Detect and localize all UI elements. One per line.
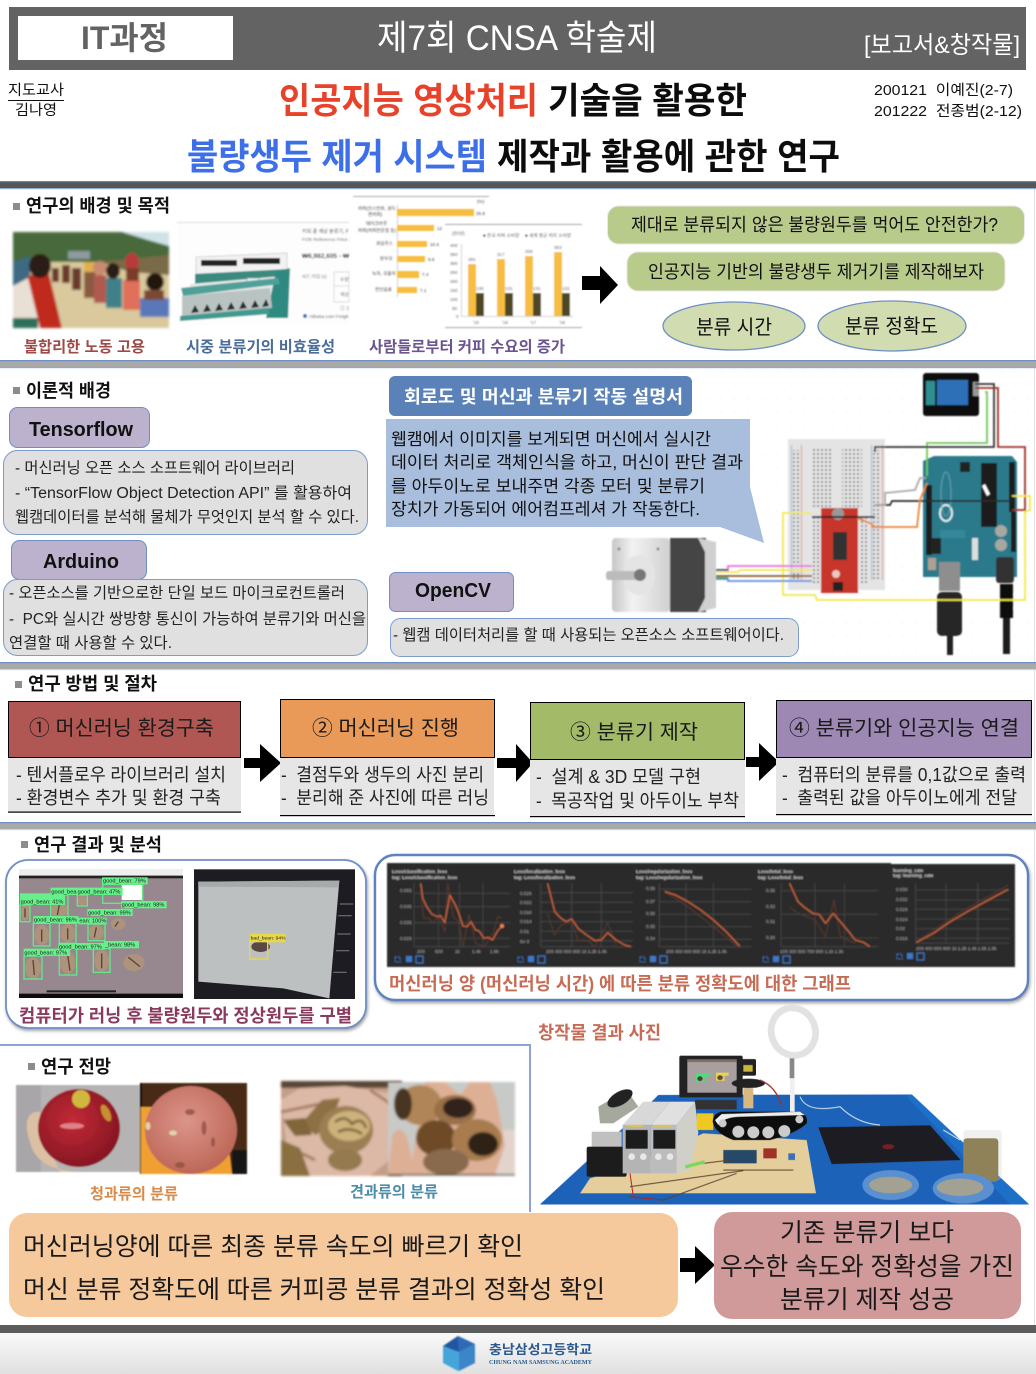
oval: accuracy [818, 301, 966, 351]
chart: coffee consumption columns: ■ 세계 평균 커피 소비량 [525, 232, 572, 239]
chart: coffee consumption columns: 131 [505, 286, 513, 291]
school logo [443, 1336, 475, 1371]
tensorboard panels: 0.025 [400, 936, 412, 941]
tensorboard panels: 1.8k [490, 949, 499, 954]
tensorboard panels: 0.036 [896, 887, 908, 892]
callout: explanation: 웹캠에서 이미지를 보게되면 머신에서 실시간 [391, 430, 711, 449]
authors: 201222 전종범(2-12) [874, 103, 1022, 120]
conclusion box: checks [9, 1213, 678, 1317]
dishes [862, 1170, 994, 1204]
question box: build [627, 252, 1005, 291]
step 3: ③ 분류기 제작 [570, 721, 698, 744]
arrow 3 [746, 743, 779, 781]
panel: theory [4, 370, 1032, 658]
tensorboard panels: 200 400 600 800 1k 1.2k 1.4k 1.6k 1.8k [916, 946, 997, 951]
tensorboard panels: 1k [455, 949, 461, 954]
relay module [923, 373, 979, 416]
caption: nuts: 견과류의 분류 [350, 1183, 438, 1201]
callout: explanation: 데이터 처리로 객체인식을 하고, 머신이 판단 결과 [391, 453, 743, 472]
heading: theory: 이론적 배경 [26, 381, 111, 401]
chart: coffee consumption columns: 291 [468, 257, 476, 262]
chart: coffee consumption columns: '16 [502, 320, 508, 325]
tensorboard panels: 200 [417, 949, 425, 954]
header: circuit explanation: 회로도 및 머신과 분류기 작동 설명서 [404, 387, 683, 407]
tensorboard panels: 0.045 [400, 904, 412, 909]
advisor [8, 82, 64, 119]
photo: finished product [540, 1002, 1029, 1204]
tensorboard panels: 0.018 [520, 910, 532, 915]
caption: labor: 불합리한 노동 고용 [24, 338, 145, 356]
photo: bad bean detection: bad_bean: 94% [251, 935, 286, 941]
photo: good bean detection: good_bean: 47% [78, 889, 120, 895]
caption: fruits: 청과류의 분류 [90, 1185, 178, 1203]
text box: OpenCV [390, 618, 798, 656]
chart: coffee use bars: 테이크아웃 [366, 220, 387, 227]
main title: 기술을 활용한 [548, 80, 747, 121]
photo: workers sorting beans [13, 232, 169, 328]
tag: OpenCV: OpenCV [415, 580, 492, 602]
step 3: - 목공작업 및 아두이노 부착 [536, 791, 739, 811]
box: training graphs [375, 855, 1028, 1000]
track label box [18, 16, 233, 60]
tensorboard panels: 0.014 [520, 919, 532, 924]
conclusion box: success: 우수한 속도와 정확성을 가진 [720, 1253, 1014, 1281]
tensorboard panels: 0.032 [896, 897, 908, 902]
report tag: [보고서&창작물] [864, 32, 1020, 59]
text box: OpenCV: - 웹캠 데이터처리를 할 때 사용되는 오픈소스 소프트웨어이다. [393, 626, 784, 644]
text box: Tensorflow: - 머신러닝 오픈 소스 소프트웨어 라이브러리 [15, 459, 295, 477]
track label box: IT과정 [81, 20, 168, 56]
chart: coffee consumption columns: '15 [473, 320, 479, 325]
photo: good walnut [281, 1081, 402, 1176]
step 1: - 환경변수 추가 및 환경 구축 [16, 788, 221, 808]
conclusion box: checks: 머신러닝양에 따른 최종 분류 속도의 빠르기 확인 [23, 1233, 523, 1261]
tag: Tensorflow [10, 408, 150, 448]
step 2: - 결점두와 생두의 사진 분리 [281, 765, 484, 785]
photo: good bean detection: good_bean: 98% [122, 903, 164, 909]
tensorboard panels: tag: Loss/regularization_loss [636, 875, 703, 881]
heading: background: 연구의 배경 및 목적 [26, 196, 170, 216]
chart: coffee use bars: 면커피) [368, 211, 383, 218]
chart: coffee consumption columns: 336 [525, 249, 533, 254]
oval: time [663, 302, 805, 350]
event name: 제7회 CNSA 학술제 [377, 19, 657, 58]
chart: coffee use bars: 26.9 [476, 211, 485, 216]
caption: detection: 컴퓨터가 러닝 후 불량원두와 정상원두를 구별 [19, 1006, 352, 1026]
heading: product photo: 창작물 결과 사진 [538, 1023, 661, 1043]
school name: CHUNG NAM SAMSUNG ACADEMY [489, 1359, 592, 1366]
chart: coffee consumption columns: '17 [530, 320, 536, 325]
caption: graphs: 머신러닝 양 (머신러닝 시간) 에 따른 분류 정확도에 대한 그래프 [389, 974, 851, 994]
tensorboard panels: Loss/total_loss [758, 869, 793, 875]
tensorboard panels: 0.026 [520, 891, 532, 896]
chart: coffee consumption columns: 0 [456, 314, 459, 319]
photo: bad bean detection [194, 869, 355, 999]
chart: coffee consumption columns: 132 [562, 286, 570, 291]
photo: good bean detection: good_bean: 99% [88, 910, 131, 916]
chart: coffee consumption columns: '18 [559, 320, 565, 325]
photo: good apple [16, 1085, 140, 1172]
tensorboard panels: 600 [435, 949, 443, 954]
step 1 [8, 702, 241, 813]
chart: coffee use bars: 커피(인스턴트, 원두, [358, 205, 397, 212]
tensorboard panels: tag: Loss/localization_loss [514, 875, 575, 881]
chart: coffee consumption columns: 200 [450, 279, 458, 284]
text box: Arduino: - PC와 실시간 쌍방향 통신이 가능하여 분류기와 머신을 [9, 610, 366, 628]
chart: coffee use bars: 커피(커피전문점 등) [358, 227, 397, 234]
photo: commercial sorter: 커피 콩 색상 분류기, F [302, 228, 349, 235]
question box: safety [608, 206, 1024, 244]
tensorboard panels: 0.29 [766, 935, 775, 940]
driver board [821, 508, 858, 593]
chart: coffee consumption columns: 300 [450, 261, 458, 266]
conveyor [713, 1112, 807, 1140]
callout: explanation: 를 아두이노로 보내주면 각종 모터 및 분류기 [391, 477, 705, 496]
heading: results: 연구 결과 및 분석 [34, 835, 162, 855]
step 3 [530, 702, 745, 817]
tensorboard panels: 0.02 [896, 926, 905, 931]
chart: coffee consumption columns: 100 [450, 297, 458, 302]
step 3: - 설계 & 3D 모델 구현 [536, 767, 701, 787]
power supplies [623, 1102, 698, 1173]
step 1: - 텐서플로우 라이브러리 설치 [16, 765, 226, 785]
panel: background and purpose [13, 196, 1024, 356]
chart: coffee consumption columns [445, 224, 582, 328]
arrow 2 [497, 744, 533, 782]
chart: coffee consumption columns: 317 [497, 252, 505, 257]
photo: commercial sorter: Alibaba.com Freigh [309, 314, 349, 319]
photo: good bean detection [19, 869, 183, 998]
photo: good bean detection: good_bean: 96% [34, 918, 77, 924]
conclusion box: success: 분류기 제작 성공 [780, 1286, 954, 1314]
usb cable [937, 562, 962, 655]
text box: Arduino: 연결할 때 사용할 수 있다. [9, 634, 172, 652]
tensorboard panels: tag: learning_rate [893, 873, 934, 879]
solder tool [587, 1086, 638, 1177]
tensorboard panels: 0.022 [520, 900, 532, 905]
conclusion box: success [714, 1212, 1021, 1319]
tensorboard panels: 0.36 [646, 911, 655, 916]
chart: coffee consumption columns: 131 [533, 286, 541, 291]
chart: coffee consumption columns: 353 [554, 245, 562, 250]
text box: Tensorflow: - “TensorFlow Object Detection API” 를 활용하여 [15, 484, 352, 502]
question box: safety: 제대로 분류되지 않은 불량원두를 먹어도 안전한가? [631, 215, 998, 235]
tensorboard panels: 6e-3 [520, 939, 530, 944]
photo: good bean detection: good_bea [51, 889, 77, 895]
chart: coffee consumption columns: 50 [452, 306, 458, 311]
photo: good bean detection: good_bean: 79% [103, 879, 146, 885]
conclusion box: success: 기존 분류기 보다 [780, 1219, 954, 1247]
school name: 충남삼성고등학교 [489, 1342, 592, 1357]
step 2 [280, 700, 495, 816]
tensorboard panels: 0.035 [400, 920, 412, 925]
text box: Tensorflow [4, 450, 368, 534]
tensorboard panels: 0.35 [766, 888, 775, 893]
chart: coffee use bars [353, 196, 489, 297]
photo: commercial sorter: ₩6,982,605 - ₩ [302, 253, 350, 260]
photo: bad walnut [388, 1082, 515, 1176]
tensorboard panels: 0.01 [520, 929, 529, 934]
tensorboard panels: 0.35 [646, 924, 655, 929]
step 1: ① 머신러닝 환경구축 [29, 717, 214, 740]
tensorboard panels: 0.055 [400, 888, 412, 893]
main title: 인공지능 영상처리 [279, 80, 538, 121]
breadboard [788, 439, 885, 590]
heading: outlook: 연구 전망 [41, 1057, 111, 1077]
step 4: - 컴퓨터의 분류를 0,1값으로 출력 [782, 765, 1026, 785]
photo: damaged apple [140, 1083, 247, 1174]
beaker [963, 1130, 1002, 1182]
tag: Arduino: Arduino [43, 551, 119, 573]
step 2: - 분리해 준 사진에 따른 러닝 [281, 788, 489, 808]
stepper motor [606, 538, 716, 612]
chart: coffee use bars: 탄우유 [380, 255, 393, 262]
step 2: ② 머신러닝 진행 [312, 717, 459, 740]
photo: commercial sorter: ① 1 [340, 305, 349, 312]
chart: coffee use bars: 녹차, 곡물차 [372, 270, 396, 277]
photo: commercial sorter: FOB Reference Price : [302, 237, 350, 243]
tensorboard panels: tag: Loss/classification_loss [392, 875, 458, 881]
tensorboard panels: Loss/localization_loss [514, 869, 565, 875]
chart: coffee consumption columns: 150 [450, 288, 458, 293]
chart: coffee consumption columns: 400 [450, 243, 458, 248]
tensorboard panels: 0.38 [646, 886, 655, 891]
photo: commercial sorter [177, 222, 350, 325]
tensorboard panels: 0.37 [646, 899, 655, 904]
question box: build: 인공지능 기반의 불량생두 제거기를 제작해보자 [648, 262, 984, 282]
callout: explanation [386, 419, 764, 543]
ring light [765, 1002, 822, 1112]
conclusion box: checks: 머신 분류 정확도에 따른 커피콩 분류 결과의 정확성 확인 [23, 1276, 605, 1304]
laptop [818, 1125, 961, 1164]
tensorboard panels: Loss/regularization_loss [636, 869, 693, 875]
chart: coffee use bars: 9.6 [428, 257, 435, 262]
box: detection results [6, 860, 366, 1028]
photo: good bean detection: good_bean: 97% [59, 944, 102, 950]
chart: coffee use bars: 12 [437, 226, 443, 231]
tensorboard panels: tag: Loss/total_loss [758, 875, 803, 881]
caption: demand: 사람들로부터 커피 수요의 증가 [369, 338, 565, 356]
tensorboard panels [387, 863, 1015, 967]
header: circuit explanation [389, 376, 692, 416]
step 4: - 출력된 값을 아두이노에게 전달 [782, 788, 1017, 808]
main title: 불량생두 제거 시스템 [187, 136, 487, 177]
tensorboard panels: 0.028 [896, 907, 908, 912]
chart: coffee use bars: 7.4 [422, 272, 429, 277]
school name [489, 1342, 592, 1366]
tensorboard panels: 0.024 [896, 917, 908, 922]
main title [187, 80, 840, 177]
circuit on base [630, 1148, 795, 1200]
power jack [996, 557, 1014, 654]
chart: coffee consumption columns: 250 [450, 270, 458, 275]
tensorboard panels: learning_rate [893, 868, 923, 874]
heading: method: 연구 방법 및 절차 [28, 674, 157, 694]
tensorboard panels: 1.4k [472, 949, 481, 954]
arrow: to questions [582, 266, 618, 304]
wooden base [580, 1133, 816, 1193]
header bar [9, 7, 1026, 70]
chart: coffee consumption columns: ■ 한국 커피 소비량 [483, 232, 520, 239]
panel: method [8, 674, 1032, 817]
tensorboard panels: 0.34 [646, 936, 655, 941]
photo: commercial sorter: 씨드 타입 (s) [302, 273, 327, 280]
authors: 200121 이예진(2-7) [874, 82, 1013, 99]
arrow 1 [244, 744, 281, 782]
text box: Arduino [4, 580, 368, 656]
tensorboard panels: 200 400 600 800 1k 1.2k 1.4k [546, 949, 607, 954]
authors [874, 82, 1022, 120]
advisor: 지도교사 [8, 82, 64, 99]
chart: coffee use bars: (%) [477, 199, 485, 204]
tensorboard panels: Loss/classification_loss [392, 869, 448, 875]
callout: explanation: 장치가 가동되어 에어컴프레셔 가 작동한다. [391, 500, 700, 519]
tensorboard panels: 200 400 600 800 1k 1.2k 1.4k [666, 949, 727, 954]
panel: results [6, 835, 1028, 1028]
panel: outlook [0, 1045, 530, 1212]
wires [708, 384, 1030, 600]
photo: good bean detection: good_bean: 41% [21, 899, 63, 905]
chart: coffee use bars: 10.4 [430, 242, 439, 247]
arduino board [923, 456, 1017, 577]
tensorboard panels: 0.33 [766, 904, 775, 909]
chart: coffee use bars: 전인음료 [375, 286, 392, 292]
arrow: conclusion [680, 1246, 715, 1284]
text box: Tensorflow: 웹캠데이터를 분석해 물체가 무엇인지 분석 할 수 있다. [15, 508, 359, 526]
chart: coffee consumption columns: 350 [450, 252, 458, 257]
oval: accuracy: 분류 정확도 [845, 315, 938, 338]
chart: coffee consumption columns: (잔/년) [452, 230, 465, 236]
step 4 [776, 700, 1032, 815]
circuit diagram [600, 370, 1032, 658]
tensorboard panels: 0.31 [766, 919, 775, 924]
text box: Arduino: - 오픈소스를 기반으로한 단일 보드 마이크로컨트롤러 [9, 584, 345, 602]
footer [0, 1325, 1036, 1374]
photo: commercial sorter: 색상 [340, 291, 349, 298]
oval: time: 분류 시간 [696, 316, 772, 339]
tag: Arduino [12, 540, 146, 580]
photo: good bean detection: ean: 100% [79, 919, 106, 925]
main title: 제작과 활용에 관한 연구 [497, 136, 840, 177]
tag: Tensorflow: Tensorflow [29, 419, 133, 441]
chart: coffee use bars: 과일주스 [376, 240, 393, 247]
tensorboard panels: 100 300 500 700 900 1.1k 1.3k [780, 949, 844, 954]
step 4: ④ 분류기와 인공지능 연결 [789, 717, 1019, 740]
photo: good bean detection: _bean: 98% [104, 943, 135, 949]
photo: commercial sorter: 수량 [340, 276, 349, 283]
tensorboard panels: 0.016 [896, 936, 908, 941]
chart: coffee use bars: 7.1 [420, 288, 427, 293]
advisor: 김나영 [15, 102, 57, 119]
monitor [679, 1056, 743, 1097]
chart: coffee consumption columns: 130 [476, 286, 484, 291]
photo: good bean detection: good_bean: 97% [24, 950, 67, 956]
tag: OpenCV [390, 572, 514, 612]
caption: sorter: 시중 분류기의 비효율성 [186, 338, 335, 356]
